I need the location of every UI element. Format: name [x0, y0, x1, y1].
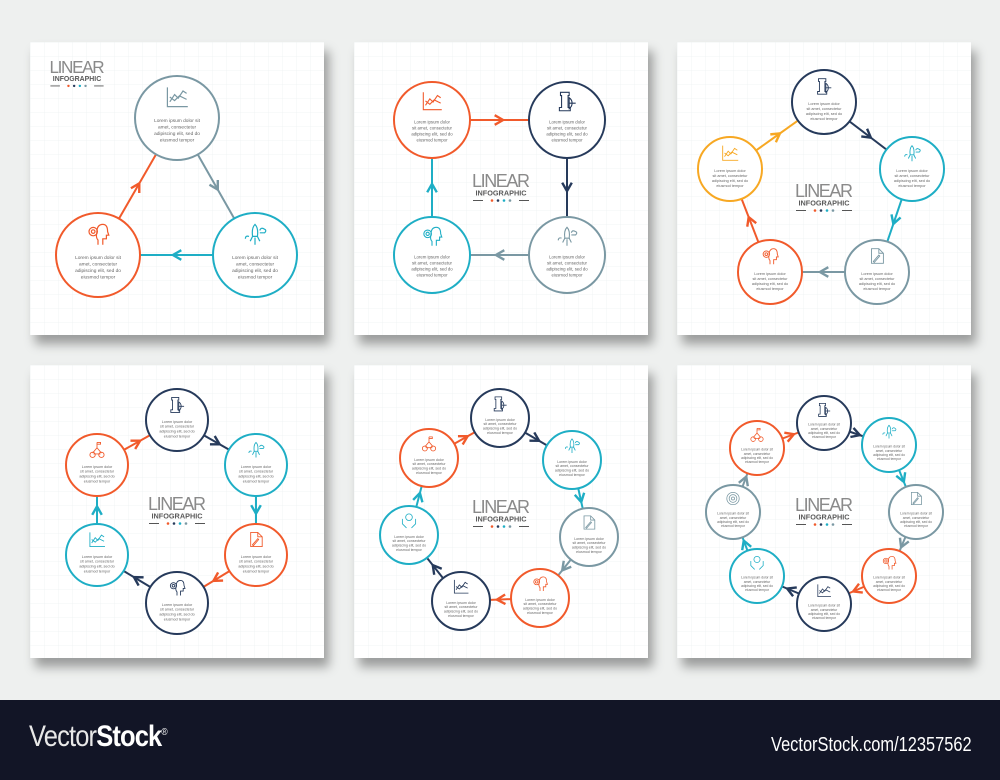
step 6 teal: Lorem ipsum dolor sit [741, 576, 773, 580]
step: orange: eiusmod tempor [756, 287, 784, 291]
step: teal: Lorem ipsum dolor [241, 465, 272, 469]
step 6 teal: adipiscing elit, sed do [392, 544, 426, 548]
step: navy bottom [146, 572, 208, 634]
panel 1: three-step cycle [30, 42, 324, 335]
step: orange: eiusmod tempor [416, 137, 448, 142]
step: navy: sit amet, consectetur [806, 107, 842, 111]
step 1 navy: eiusmod tempor [487, 431, 514, 435]
step: orange left: sit amet, consectetur [80, 470, 115, 474]
step 2 teal [543, 431, 601, 489]
step: gray: Lorem ipsum dolor sit [154, 118, 201, 124]
step: teal [880, 137, 944, 201]
step: orange: Lorem ipsum dolor sit [75, 255, 122, 261]
step 5 navy: adipiscing elit, sed do [808, 612, 840, 616]
step 1 navy: sit amet, consectetur [483, 422, 517, 426]
step 2 teal: Lorem ipsum dolor [557, 460, 588, 464]
step: navy: adipiscing elit, sed do [806, 112, 842, 116]
step 1 navy: Lorem ipsum dolor sit [808, 423, 840, 427]
step 6 teal [380, 506, 438, 564]
step: teal left: sit amet, consectetur [80, 560, 115, 564]
step 8 orange: eiusmod tempor [745, 460, 770, 464]
step: teal: Lorem ipsum dolor [414, 255, 450, 260]
logo [472, 497, 530, 528]
step: teal [394, 217, 470, 293]
step: gray: eiusmod tempor [160, 138, 195, 144]
step: navy: eiusmod tempor [810, 117, 838, 121]
step: orange [56, 213, 140, 297]
step 1 navy: amet, consectetur [811, 427, 838, 431]
step 3 gray: adipiscing elit, sed do [900, 520, 932, 524]
step 5 navy: sit amet, consectetur [444, 605, 478, 609]
step 2 teal: eiusmod tempor [559, 473, 586, 477]
step 1 navy: adipiscing elit, sed do [808, 431, 840, 435]
step: gray: eiusmod tempor [551, 272, 583, 277]
step: navy top: Lorem ipsum dolor [162, 420, 193, 424]
step: navy bottom: adipiscing elit, sed do [159, 613, 195, 617]
step 3 gray: Lorem ipsum dolor [574, 537, 605, 541]
step 4 orange: adipiscing elit, sed do [523, 607, 557, 611]
step 5 navy: eiusmod tempor [812, 616, 837, 620]
step: orange: adipiscing elit, sed do [411, 131, 453, 136]
step: gray: Lorem ipsum dolor [549, 255, 585, 260]
step 7 gray: Lorem ipsum dolor sit [717, 512, 749, 516]
step: teal: Lorem ipsum dolor [896, 169, 928, 173]
step 6 teal: Lorem ipsum dolor [394, 535, 425, 539]
step 3 gray [560, 508, 618, 566]
logo [795, 495, 853, 526]
step 7 orange [400, 429, 458, 487]
logo [472, 171, 530, 202]
step 7 orange: sit amet, consectetur [412, 462, 446, 466]
step: orange left [66, 434, 128, 496]
step: navy top: eiusmod tempor [164, 434, 191, 438]
step 7 orange: Lorem ipsum dolor [414, 458, 445, 462]
step 2 teal: sit amet, consectetur [555, 464, 589, 468]
step: navy: eiusmod tempor [551, 137, 583, 142]
step: navy bottom: eiusmod tempor [164, 617, 191, 621]
step 2 teal: adipiscing elit, sed do [873, 453, 905, 457]
panel 5: seven-step cycle [354, 365, 648, 658]
step: navy top: sit amet, consectetur [160, 425, 195, 429]
step: teal: eiusmod tempor [243, 479, 270, 483]
step 4 orange: eiusmod tempor [877, 588, 902, 592]
step 4 orange: amet, consectetur [876, 580, 903, 584]
step 1 navy: Lorem ipsum dolor [485, 418, 516, 422]
step: teal: eiusmod tempor [898, 184, 926, 188]
panel 2: four-step cycle [354, 42, 648, 335]
step 5 navy: eiusmod tempor [448, 614, 475, 618]
step 4 orange: Lorem ipsum dolor sit [873, 576, 905, 580]
step 7 gray: adipiscing elit, sed do [717, 520, 749, 524]
step: navy top [146, 389, 208, 451]
step 4 orange: Lorem ipsum dolor [525, 598, 556, 602]
step: gray: sit amet, consectetur [547, 261, 588, 266]
step 2 teal: Lorem ipsum dolor sit [873, 445, 905, 449]
step: teal left: eiusmod tempor [84, 569, 111, 573]
step: teal: Lorem ipsum dolor sit [232, 255, 279, 261]
step 3 gray: Lorem ipsum dolor sit [900, 512, 932, 516]
step 8 orange: adipiscing elit, sed do [741, 456, 773, 460]
step 5 navy: amet, consectetur [811, 608, 838, 612]
step: orange [738, 240, 802, 304]
step 5 navy: Lorem ipsum dolor sit [808, 604, 840, 608]
step: orange [394, 82, 470, 158]
step: navy top: adipiscing elit, sed do [159, 430, 195, 434]
footer bar [0, 700, 1000, 780]
step: navy: Lorem ipsum dolor [808, 102, 840, 106]
step 1 navy [471, 389, 529, 447]
step: teal: sit amet, consectetur [412, 261, 453, 266]
step 3 gray: eiusmod tempor [576, 550, 603, 554]
step: teal [225, 434, 287, 496]
step 4 orange [862, 549, 916, 603]
step: navy [792, 70, 856, 134]
logo [148, 494, 206, 525]
step: orange: Lorem ipsum dolor [754, 272, 786, 276]
step 2 teal: amet, consectetur [876, 449, 903, 453]
step: gray: Lorem ipsum dolor [861, 272, 893, 276]
step 7 orange: adipiscing elit, sed do [412, 467, 446, 471]
step 1 navy: eiusmod tempor [812, 435, 837, 439]
step: orange: Lorem ipsum dolor [241, 555, 272, 559]
step: teal [213, 213, 297, 297]
step: teal: eiusmod tempor [238, 274, 273, 280]
logo [49, 58, 105, 87]
step: teal left: Lorem ipsum dolor [82, 555, 113, 559]
step 7 gray: eiusmod tempor [721, 524, 746, 528]
step: teal: sit amet, consectetur [894, 174, 930, 178]
step: orange: amet, consectetur [79, 262, 117, 268]
step 6 teal: amet, consectetur [744, 580, 771, 584]
step 4 orange [511, 569, 569, 627]
step: teal: sit amet, consectetur [239, 470, 274, 474]
step: orange: adipiscing elit, sed do [238, 565, 274, 569]
step: orange [225, 524, 287, 586]
step: gray [845, 240, 909, 304]
step: orange: eiusmod tempor [81, 274, 116, 280]
connectors [409, 418, 589, 601]
step 2 teal: eiusmod tempor [877, 457, 902, 461]
step: navy [529, 82, 605, 158]
step: teal left: adipiscing elit, sed do [79, 565, 115, 569]
step: orange left: Lorem ipsum dolor [82, 465, 113, 469]
step: gray: eiusmod tempor [863, 287, 891, 291]
brand wordmark: VectorStock® [29, 720, 167, 753]
step: orange left: eiusmod tempor [84, 479, 111, 483]
connectors [730, 102, 912, 272]
step: orange: sit amet, consectetur [239, 560, 274, 564]
connectors [432, 120, 567, 255]
step 4 orange: adipiscing elit, sed do [873, 584, 905, 588]
step: orange: sit amet, consectetur [412, 126, 453, 131]
step 1 navy [797, 396, 851, 450]
logo [795, 181, 853, 212]
step: orange: Lorem ipsum dolor [414, 120, 450, 125]
step 2 teal: adipiscing elit, sed do [555, 469, 589, 473]
step: navy: Lorem ipsum dolor [549, 120, 585, 125]
step: orange: adipiscing elit, sed do [752, 282, 788, 286]
step 3 gray: eiusmod tempor [904, 524, 929, 528]
step: teal: adipiscing elit, sed do [894, 179, 930, 183]
step: teal: adipiscing elit, sed do [411, 266, 453, 271]
panel 4: six-step cycle [30, 365, 324, 658]
step 3 gray: amet, consectetur [903, 516, 930, 520]
step: yellow: adipiscing elit, sed do [712, 179, 748, 183]
panel 6: eight-step cycle [677, 365, 971, 658]
step: orange: eiusmod tempor [243, 569, 270, 573]
panel 3: five-step cycle [677, 42, 971, 335]
connectors [97, 420, 256, 603]
step 5 navy: Lorem ipsum dolor [446, 601, 477, 605]
step: gray: adipiscing elit, sed do [154, 131, 200, 137]
step: gray: adipiscing elit, sed do [546, 266, 588, 271]
step: navy: adipiscing elit, sed do [546, 131, 588, 136]
step 2 teal [862, 418, 916, 472]
step 6 teal: adipiscing elit, sed do [741, 584, 773, 588]
step 8 orange: Lorem ipsum dolor sit [741, 448, 773, 452]
step 8 orange: amet, consectetur [744, 452, 771, 456]
step 6 teal: sit amet, consectetur [392, 539, 426, 543]
step: yellow: Lorem ipsum dolor [714, 169, 746, 173]
step: teal: eiusmod tempor [416, 272, 448, 277]
step 8 orange [730, 421, 784, 475]
step: orange left: adipiscing elit, sed do [79, 475, 115, 479]
step 6 teal [730, 549, 784, 603]
step 4 orange: eiusmod tempor [527, 611, 554, 615]
step: teal: adipiscing elit, sed do [232, 268, 278, 274]
connectors [98, 118, 255, 255]
step: orange: adipiscing elit, sed do [75, 268, 121, 274]
step: teal: amet, consectetur [236, 262, 274, 268]
step 4 orange: sit amet, consectetur [523, 602, 557, 606]
step 7 gray [706, 485, 760, 539]
step 6 teal: eiusmod tempor [745, 588, 770, 592]
step: gray [529, 217, 605, 293]
step 3 gray: adipiscing elit, sed do [572, 546, 606, 550]
step: teal: adipiscing elit, sed do [238, 475, 274, 479]
step 7 orange: eiusmod tempor [416, 471, 443, 475]
step 7 gray: amet, consectetur [720, 516, 747, 520]
step 5 navy: adipiscing elit, sed do [444, 610, 478, 614]
step 3 gray: sit amet, consectetur [572, 541, 606, 545]
step: navy bottom: Lorem ipsum dolor [162, 603, 193, 607]
step: yellow [698, 137, 762, 201]
step 1 navy: adipiscing elit, sed do [483, 427, 517, 431]
step: gray: amet, consectetur [158, 124, 196, 130]
step: gray: sit amet, consectetur [859, 277, 895, 281]
step: teal left [66, 524, 128, 586]
step: orange: sit amet, consectetur [752, 277, 788, 281]
step: yellow: eiusmod tempor [716, 184, 744, 188]
step: navy bottom: sit amet, consectetur [160, 608, 195, 612]
connectors [733, 423, 916, 604]
step: yellow: sit amet, consectetur [712, 174, 748, 178]
step 5 navy [432, 572, 490, 630]
step: navy: sit amet, consectetur [547, 126, 588, 131]
step: gray [135, 76, 219, 160]
image id: VectorStock.com/12357562 [771, 734, 972, 756]
step 6 teal: eiusmod tempor [396, 548, 423, 552]
step 5 navy [797, 577, 851, 631]
step 3 gray [889, 485, 943, 539]
step: gray: adipiscing elit, sed do [859, 282, 895, 286]
